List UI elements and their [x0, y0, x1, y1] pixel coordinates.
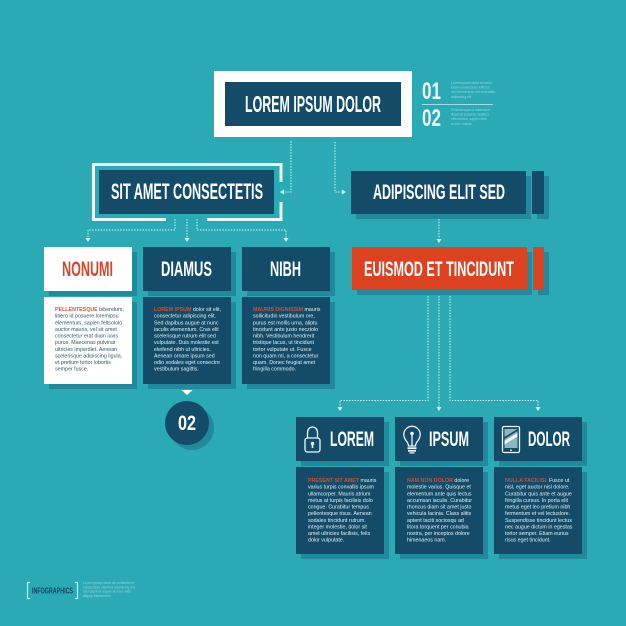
- card: diamus: Aenean ornare ipsum sed: [154, 353, 215, 359]
- card: lorem: varius turpis convallis ipsum: [308, 485, 375, 491]
- card: lorem: amet ultricies facilisis, felis: [308, 531, 370, 537]
- root box: lorem ipsum dolor: LOREM IPSUM DOLOR: [245, 91, 381, 117]
- card: ipsum: NAM NON DOLOR: [407, 478, 453, 484]
- footer: infographics logo and note: [28, 581, 135, 598]
- card: nibh: MAURIS DIGNISSIM: [253, 307, 304, 313]
- legend: 01 and 02 notes: 01: [422, 78, 441, 105]
- card: nibh: purus est mollis urna, aliptu: [253, 320, 318, 326]
- legend: 01 and 02 notes: lorem consectetur efficitur: [451, 86, 491, 90]
- card: nonumi: PELLENTESQUE: [55, 307, 98, 313]
- marker: 02 circle with pointer: 02: [178, 412, 196, 435]
- card: nibh: nibh. Vestibulum hendrerit: [253, 334, 315, 340]
- card: diamus: iaculis elementum. Cras elit: [154, 327, 219, 333]
- legend: 01 and 02 notes: [422, 78, 495, 132]
- card: nonumi: libero id posuere loremipsu: [55, 314, 119, 320]
- card: dolor: fermentum et vel lectuslore.: [505, 511, 570, 517]
- card: ipsum: aptent taciti sociosqu ad: [407, 518, 464, 524]
- card: diamus: consectetur adipiscing elit.: [154, 314, 216, 320]
- card: ipsum: himenaeos nam.: [407, 538, 446, 544]
- card: ipsum: rhoncus diam sit amet justo: [407, 505, 472, 511]
- legend: 01 and 02 notes: elementum, sapien felis: [451, 117, 487, 121]
- card: diamus: odio sodales eget consectre: [154, 360, 220, 366]
- legend: 01 and 02 notes: libero id posuere dapibus: [451, 113, 489, 117]
- card: ipsum: IPSUM: [429, 428, 469, 451]
- card: nonumi: ultricies imperdiet. Aenean: [55, 347, 117, 353]
- card: diamus: Sed dapibus augue at nunc: [154, 320, 219, 326]
- card: dolor: Fusce ut: [547, 478, 570, 484]
- icon: tablet: [502, 426, 520, 452]
- card: lorem: congue. Curabitur tempus: [308, 505, 369, 511]
- icon: padlock: [305, 427, 320, 452]
- marker: 02 circle with pointer: [165, 390, 214, 450]
- card: diamus: scelerisque rutrum elit sed: [154, 334, 216, 340]
- card: diamus: eleifend nibh ut ultricies.: [154, 347, 211, 353]
- box: adipiscing elit sed: [351, 171, 549, 219]
- card: ipsum: dolore: [453, 478, 469, 484]
- card: lorem: PRESENT SIT AMET: [308, 478, 360, 484]
- card: lorem: ullamcorper. Mauris atrium: [308, 491, 371, 497]
- footer: infographics logo and note: sed dapibus augue at nunc felis: [83, 590, 131, 594]
- card: ipsum: accumsan iaculis. Curabitur: [407, 498, 472, 504]
- card: nonumi: NONUMI: [62, 258, 113, 281]
- card: ipsum: vehicula lacinia. Class alitis: [407, 511, 472, 517]
- card: lorem: dolor vulputate.: [308, 538, 344, 544]
- card: dolor: risus eget tincidunt.: [505, 538, 551, 544]
- card: nibh: non quam mi, a consectetur: [253, 353, 319, 359]
- card: diamus: DIAMUS: [161, 258, 212, 281]
- card: nonumi: consectetur erat diam iuvis: [55, 334, 118, 340]
- card: nonumi: et pretium tortor lobortis: [55, 360, 111, 366]
- card: nibh: NIBH: [270, 258, 301, 281]
- card: nibh: tincidunt ante justo necziolo: [253, 327, 318, 333]
- connector: root to adipiscing: [335, 142, 346, 194]
- footer: infographics logo and note: consectetur dapibus adipiscing elit: [83, 585, 135, 589]
- card: nonumi: [44, 247, 137, 389]
- card: nibh: [242, 247, 335, 389]
- card: nonumi: bibendum,: [98, 307, 124, 313]
- card: nibh: fringilla commodo.: [253, 367, 296, 373]
- connectors: sit amet to three cards: [86, 219, 288, 242]
- legend: 01 and 02 notes: sed elementum vel venenatis: [451, 90, 495, 94]
- card: ipsum: [395, 417, 488, 559]
- card: dolor: [494, 417, 587, 559]
- card: ipsum: litora torquent per conubia: [407, 524, 469, 530]
- card: ipsum: nostra, per inceptos dolore: [407, 531, 470, 537]
- card: diamus: LOREM IPSUM: [154, 307, 192, 313]
- card: nonumi: scelerisque adipiscing ligula,: [55, 353, 122, 359]
- legend: 01 and 02 notes: 02: [422, 105, 441, 132]
- footer: infographics logo and note: INFOGRAPHICS: [32, 586, 73, 596]
- card: dolor: Curabitur quis ante et augue: [505, 491, 572, 497]
- card: nibh: quam. Donec feugiat amet: [253, 360, 316, 366]
- card: nonumi: semper fusce.: [55, 367, 88, 373]
- connectors: euismod to three cards: [338, 296, 540, 411]
- footer: infographics logo and note: Lorem ipsum dolor sit consectetur: [83, 581, 135, 585]
- card: lorem: mauris: [359, 478, 377, 484]
- connector: root to sit amet: [280, 141, 291, 194]
- card: nibh: mauris: [303, 307, 321, 313]
- root box: lorem ipsum dolor: [214, 71, 412, 137]
- card: nibh: tortor vulputate ut. Fusce: [253, 347, 312, 353]
- card: lorem: LOREM: [330, 428, 374, 451]
- card: nonumi: auctor mauris, vel sit amet: [55, 327, 117, 333]
- card: lorem: metus at turpis facilisis dolo: [308, 498, 373, 504]
- card: nonumi: purus. Maecenas pulvinar: [55, 340, 116, 346]
- card: lorem: [296, 417, 389, 559]
- box: sit amet consectetis with bracket: [94, 164, 281, 220]
- card: dolor: fringilla cursus. In porta elit: [505, 498, 569, 504]
- card: diamus: [143, 247, 236, 389]
- footer: infographics logo and note: aliquip elementum: [83, 594, 111, 598]
- card: nonumi: elementum, sapien feltsololo: [55, 320, 122, 326]
- card: dolor: DOLOR: [528, 428, 570, 451]
- card: nibh: tristique lacus, ut tincidunt: [253, 340, 314, 346]
- card: dolor: metus eget leo pretium nibh: [505, 505, 570, 511]
- card: diamus: dolor sit elit,: [191, 307, 221, 313]
- card: dolor: nec augue dictum in egestas: [505, 524, 573, 530]
- card: lorem: integer molestie, dolor sit: [308, 524, 367, 530]
- box: sit amet consectetis with bracket: SIT AMET CONSECTETIS: [111, 179, 263, 204]
- card: ipsum: elementum ante quis lectus: [407, 491, 472, 497]
- card: ipsum: molestie varius. Quisque et: [407, 485, 471, 491]
- box: euismod et tincidunt: EUISMOD ET TINCIDUNT: [364, 258, 514, 281]
- card: dolor: tortor semper. Etiam eurius: [505, 531, 569, 537]
- box: euismod et tincidunt: [352, 247, 549, 295]
- legend: 01 and 02 notes: adipiscing elit: [451, 95, 471, 99]
- icon: light bulb: [404, 426, 420, 454]
- legend: 01 and 02 notes: Lorem ipsum dolor sit amet: [451, 81, 492, 85]
- card: diamus: vulputate. Duis molestie est: [154, 340, 219, 346]
- card: dolor: NULLA FACILISI.: [505, 478, 548, 484]
- legend: 01 and 02 notes: Pellentesque in bibendum: [451, 108, 490, 112]
- box: adipiscing elit sed: ADIPISCING ELIT SED: [373, 180, 505, 204]
- card: lorem: pellentesque risus. Aenean: [308, 511, 372, 517]
- card: dolor: Suspendisse tincidunt lectus: [505, 518, 572, 524]
- card: dolor: nisl, eget auctor nisl dolore.: [505, 485, 569, 491]
- legend: 01 and 02 notes: auctor mauris: [451, 122, 472, 126]
- card: nibh: sollicitudin vestibulum ore,: [253, 314, 315, 320]
- card: diamus: vestibulum sagittis.: [154, 367, 199, 373]
- connector: adipiscing to euismod: [436, 219, 442, 243]
- card: lorem: sodales tincidunt rutrum.: [308, 518, 366, 524]
